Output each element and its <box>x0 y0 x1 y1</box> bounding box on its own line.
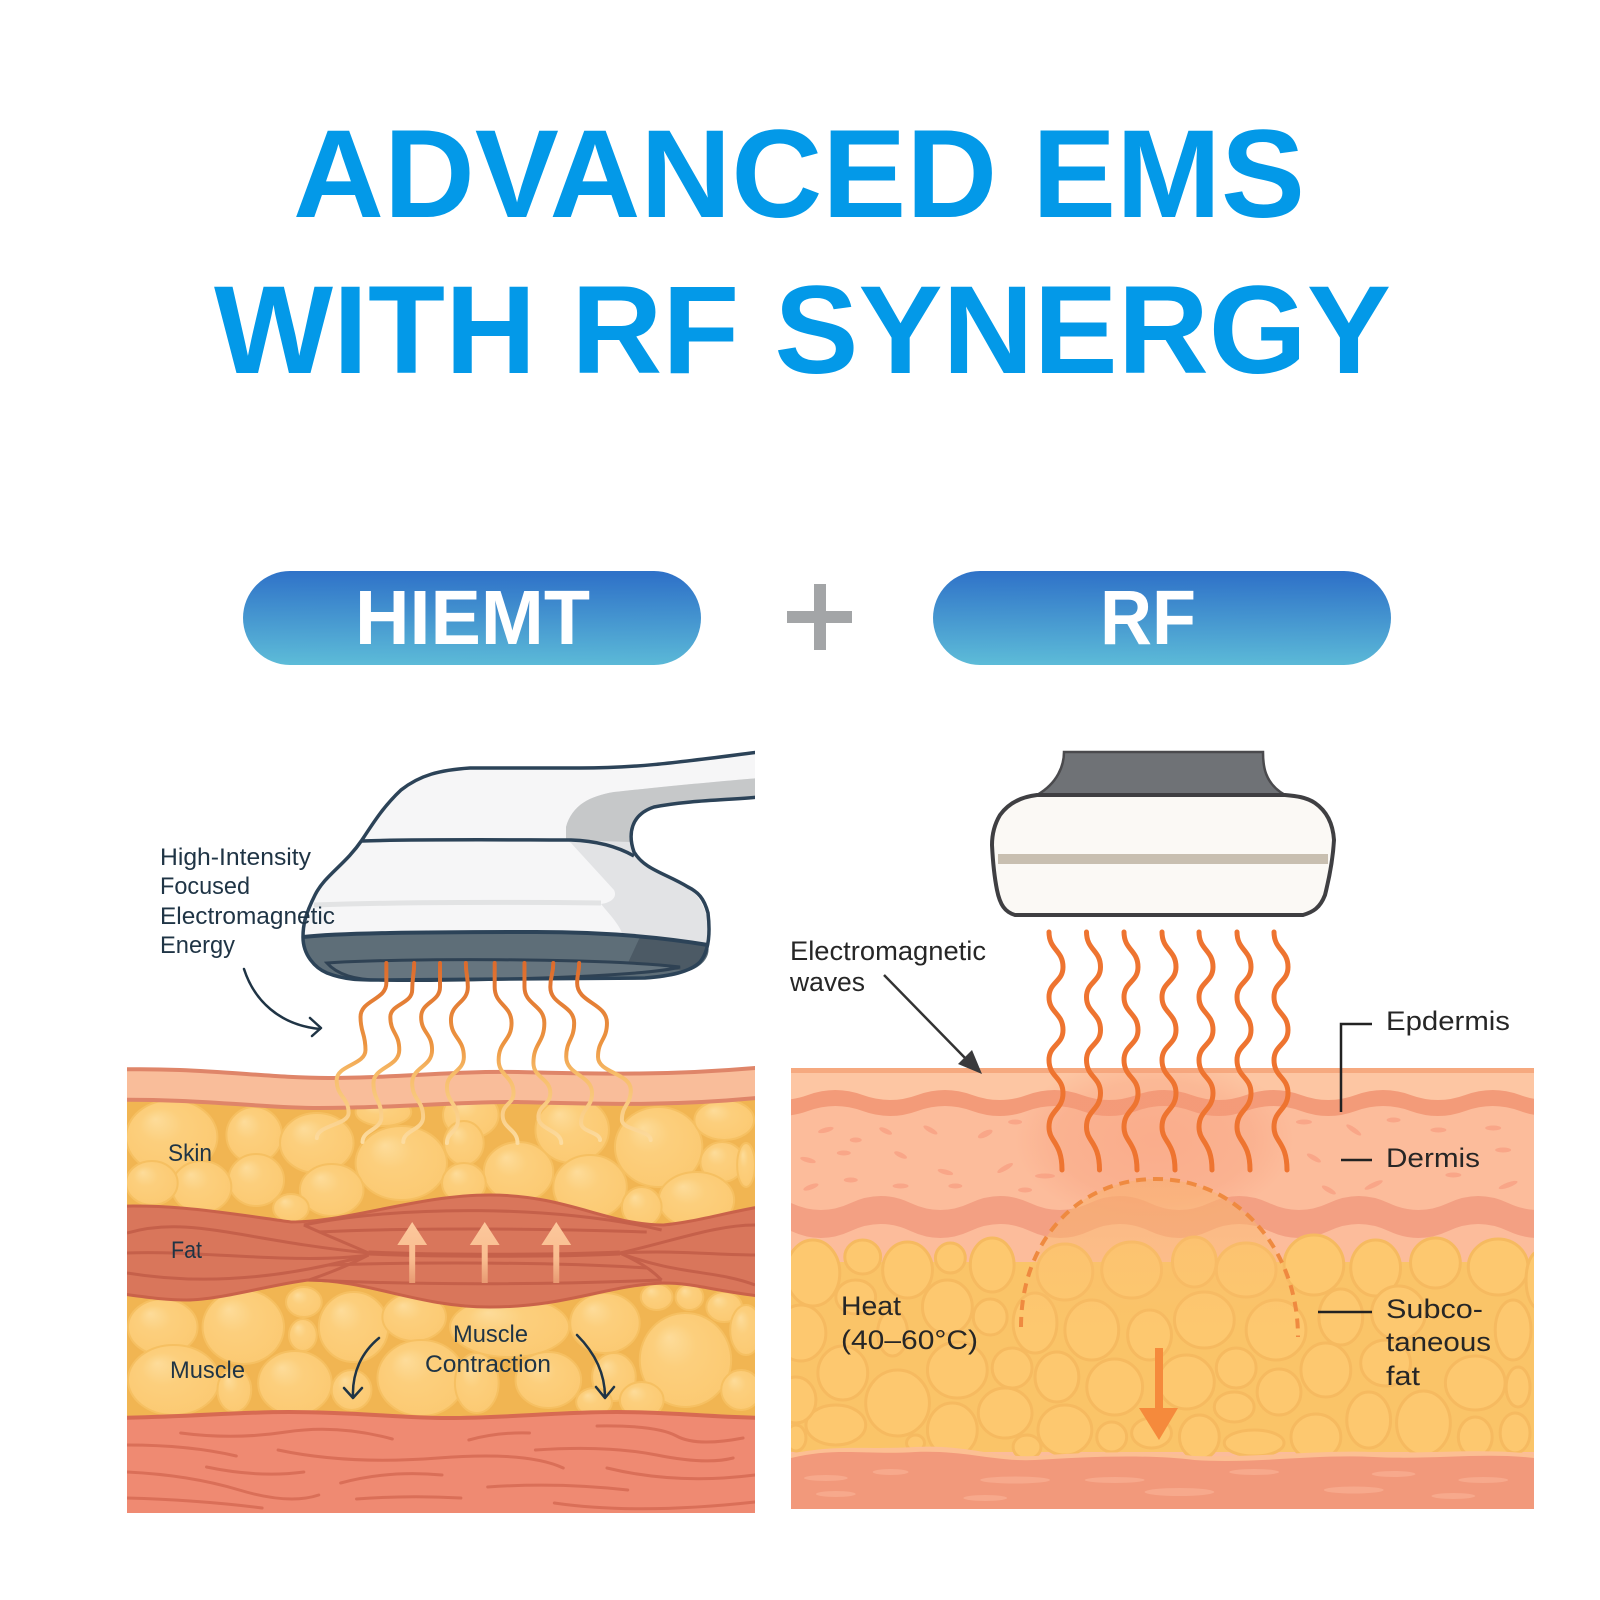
arrow: contraction left <box>344 1338 379 1398</box>
epidermis wave <box>753 1090 1575 1116</box>
energy waves left <box>317 963 651 1143</box>
arrow: heat downward <box>1139 1348 1178 1440</box>
label: High-Intensity Focused Electromagnetic Energy <box>160 844 335 959</box>
title: WITH RF SYNERGY <box>214 261 1391 400</box>
label: Heat: Heat <box>841 1291 902 1321</box>
pill: HIEMT: HIEMT <box>355 575 590 661</box>
label: High-Intensity Focused Electromagnetic Energy: Focused <box>160 873 250 900</box>
pill: RF <box>933 571 1391 665</box>
pill: HIEMT <box>243 571 701 665</box>
title: ADVANCED EMS <box>293 105 1305 244</box>
label: Subcutaneous fat: taneous <box>1386 1327 1491 1357</box>
title <box>214 105 1391 400</box>
label: Epidermis: Epdermis <box>1386 1006 1510 1036</box>
arrows: muscle lift <box>397 1222 571 1283</box>
tissue cross-section left <box>127 1066 755 1513</box>
label: Skin: Skin <box>168 1140 212 1167</box>
label: Fat: Fat <box>171 1237 202 1264</box>
label: Muscle: Muscle <box>170 1357 245 1384</box>
label: Subcutaneous fat: fat <box>1386 1361 1421 1391</box>
label: High-Intensity Focused Electromagnetic Energy: High-Intensity <box>160 844 311 871</box>
muscle band <box>100 1195 776 1307</box>
label: Electromagnetic waves <box>789 936 986 997</box>
label: High-Intensity Focused Electromagnetic Energy: Energy <box>160 932 235 959</box>
icon: plus sign <box>787 584 852 650</box>
label: Dermis: Dermis <box>1386 1143 1480 1173</box>
label: Epidermis <box>1341 1006 1510 1112</box>
label: Muscle Contraction: Muscle <box>453 1321 528 1348</box>
label: High-Intensity Focused Electromagnetic Energy: Electromagnetic <box>160 903 335 930</box>
label: Heat <box>841 1291 978 1355</box>
tissue cross-section right <box>791 1068 1534 1509</box>
pill: RF: RF <box>1100 575 1196 661</box>
label: Subcutaneous fat <box>1318 1294 1491 1391</box>
label: Muscle Contraction <box>425 1321 551 1378</box>
muscle layer bottom <box>127 1410 755 1513</box>
arrow: contraction right <box>577 1335 614 1398</box>
arrow: energy callout <box>244 969 321 1036</box>
skin layer <box>100 1066 776 1108</box>
label: Dermis <box>1341 1143 1480 1173</box>
RF waves <box>1049 932 1288 1170</box>
label: Muscle Contraction: Contraction <box>425 1351 551 1378</box>
fat layer <box>791 1262 1534 1452</box>
applicator right <box>992 752 1334 915</box>
heat boundary dashed <box>1021 1179 1298 1337</box>
panel: HIEMT tissue and applicator <box>100 752 776 1530</box>
heat dome <box>1034 1179 1280 1262</box>
label: Electromagnetic waves: waves <box>789 967 865 997</box>
muscle layer right <box>791 1446 1534 1509</box>
label: Heat: (40–60°C) <box>841 1325 978 1355</box>
applicator left <box>303 752 759 980</box>
label: Subcutaneous fat: Subco- <box>1386 1294 1483 1324</box>
dermis lower wave <box>791 1196 1534 1238</box>
dermis flecks <box>800 1118 1518 1196</box>
panel: RF tissue and applicator <box>790 750 1534 1509</box>
arrow: electromagnetic waves <box>884 975 982 1074</box>
wave glow in dermis <box>1048 1073 1262 1193</box>
label: Electromagnetic waves: Electromagnetic <box>790 936 986 966</box>
